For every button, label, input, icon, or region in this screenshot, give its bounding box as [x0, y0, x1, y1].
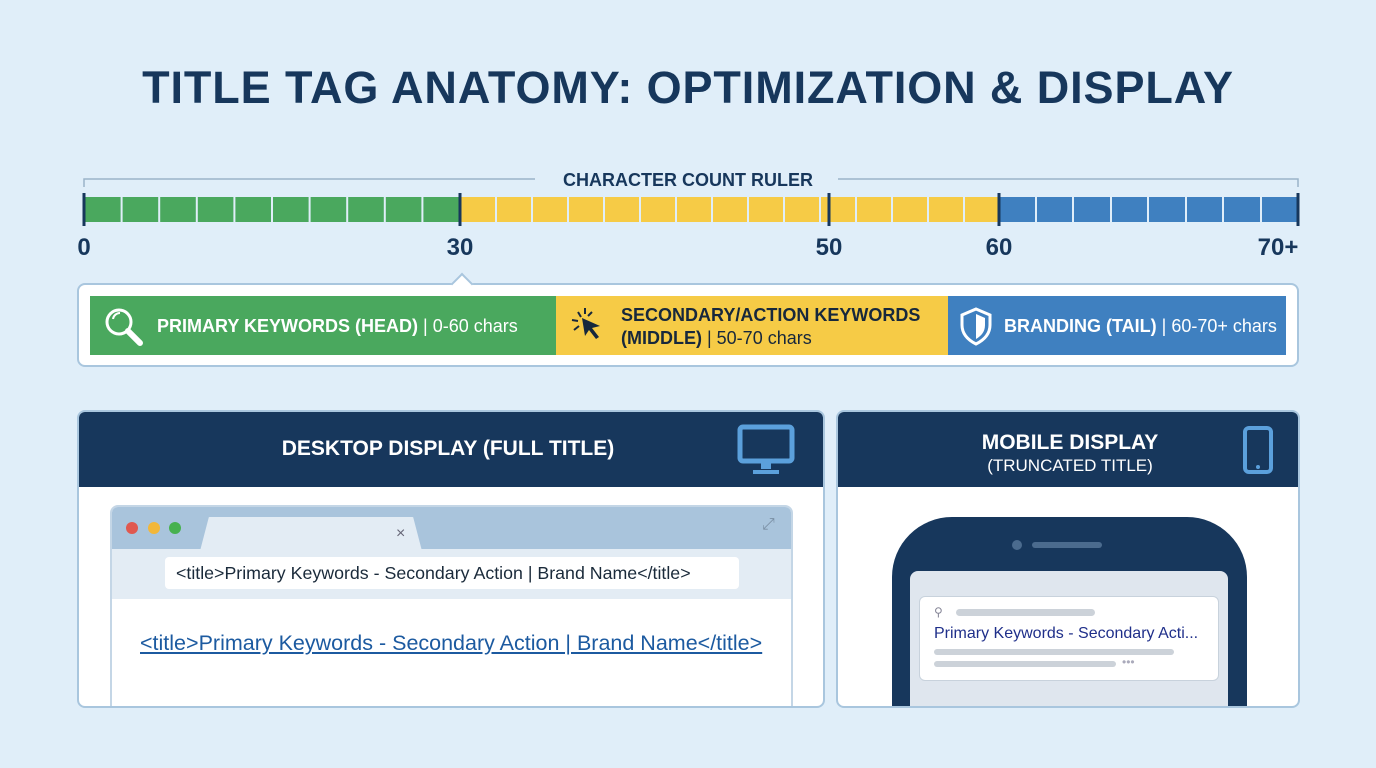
- search result card: Primary Keywords - Secondary Acti...: [934, 625, 1198, 642]
- ruler: [77, 170, 1300, 261]
- ruler: 0: [77, 234, 91, 261]
- legend: primary: PRIMARY KEYWORDS (HEAD) | 0-60 chars: [157, 316, 518, 336]
- search result link: <title>Primary Keywords - Secondary Action | Brand Name</title>: [140, 631, 762, 655]
- legend: secondary: SECONDARY/ACTION KEYWORDS: [621, 305, 920, 325]
- icon: phone: [1243, 426, 1273, 474]
- legend: branding: [948, 296, 1286, 355]
- title: TITLE TAG ANATOMY: OPTIMIZATION & DISPLAY: [142, 62, 1234, 113]
- browser window: ⤢: [762, 516, 775, 533]
- legend: branding: BRANDING (TAIL) | 60-70+ chars: [1004, 316, 1277, 336]
- address bar: <title>Primary Keywords - Secondary Action | Brand Name</title>: [176, 563, 691, 583]
- tab: [200, 517, 422, 551]
- panel: mobile: [836, 410, 1300, 708]
- pointer notch: [451, 273, 473, 295]
- legend: secondary: [556, 296, 948, 355]
- search result card: ⚲: [934, 605, 943, 619]
- search result card: [919, 596, 1219, 681]
- mobile header: (TRUNCATED TITLE): [987, 456, 1153, 475]
- icon: monitor: [738, 424, 794, 474]
- desktop header: DESKTOP DISPLAY (FULL TITLE): [282, 437, 614, 460]
- icon: magnifier: [106, 308, 143, 346]
- legend: secondary: (MIDDLE) | 50-70 chars: [621, 328, 812, 348]
- ruler: 60: [986, 234, 1012, 261]
- ruler label: CHARACTER COUNT RULER: [563, 170, 813, 190]
- ruler: 50: [816, 234, 842, 261]
- icon: cursor click: [572, 308, 600, 339]
- legend: primary: [90, 296, 556, 355]
- search result card: •••: [1122, 655, 1135, 669]
- desktop header: [79, 412, 827, 487]
- phone screen: [910, 571, 1228, 741]
- window dots: [126, 522, 138, 534]
- ruler: 30: [447, 234, 473, 261]
- mobile header: MOBILE DISPLAY: [982, 431, 1158, 454]
- icon: shield: [960, 307, 992, 346]
- ruler: 70+: [1258, 234, 1298, 261]
- mobile header: [838, 412, 1302, 487]
- tab: ×: [396, 525, 405, 542]
- legend box: [77, 283, 1299, 367]
- address bar: [165, 557, 739, 589]
- phone illustration: [892, 517, 1247, 737]
- panel: desktop: [77, 410, 825, 708]
- browser window: [110, 505, 793, 715]
